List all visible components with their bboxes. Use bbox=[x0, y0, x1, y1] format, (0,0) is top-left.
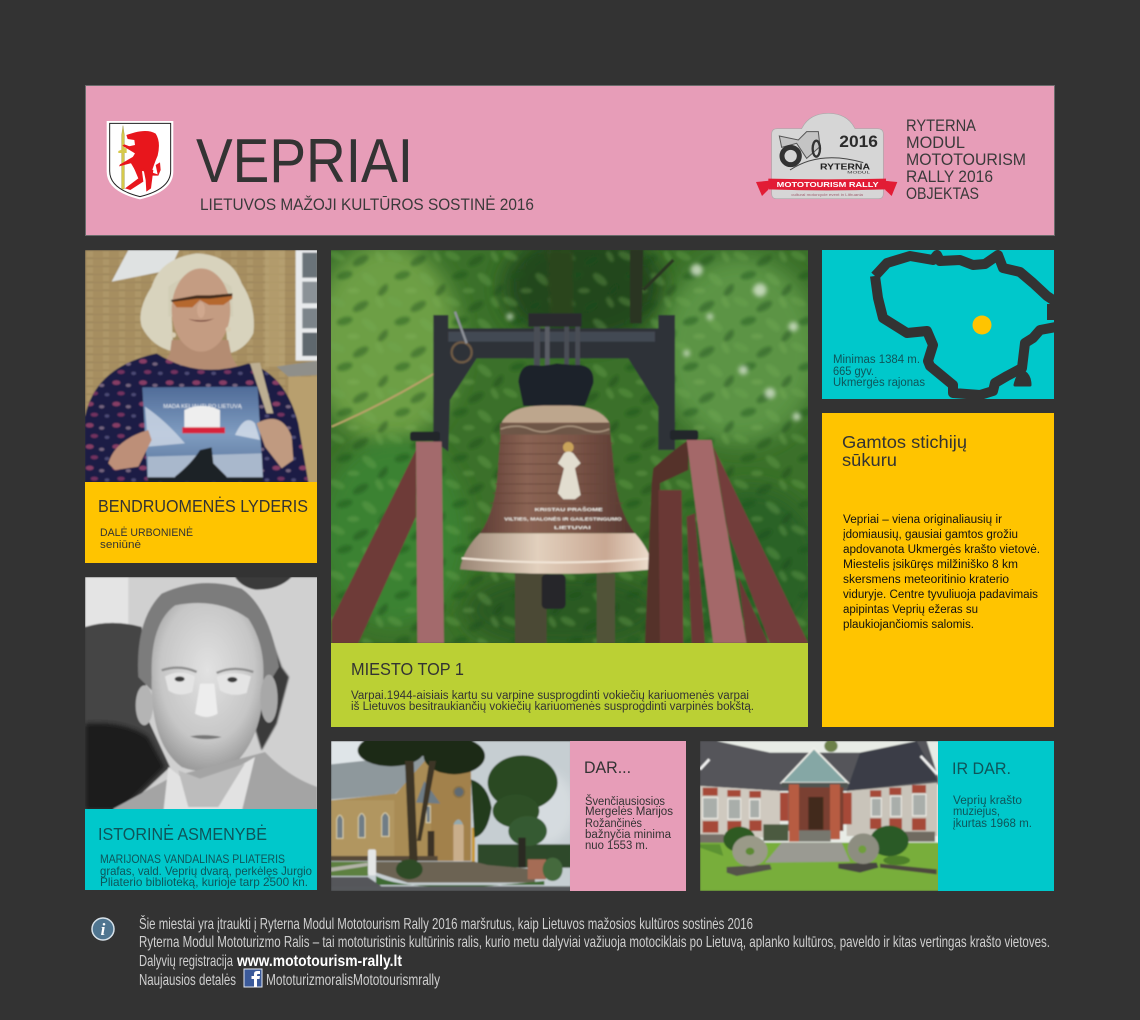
text block: muziejus, bbox=[953, 806, 1000, 818]
panel: nature description bbox=[822, 413, 1054, 727]
photo: bell in frame bbox=[331, 250, 808, 643]
text block: Pliaterio biblioteką, kurioje tarp 2500 kn. bbox=[100, 875, 308, 889]
text block bbox=[843, 514, 1040, 631]
text block: Miestelis įsikūręs milžiniško 8 km bbox=[843, 559, 1018, 571]
text block: Minimas 1384 m. bbox=[833, 354, 920, 366]
text block: Mergelės Marijos bbox=[585, 806, 673, 818]
footer text: MototurizmoralisMototourismrally bbox=[266, 972, 440, 989]
text block: skersmens meteoritinio kraterio bbox=[843, 574, 1009, 586]
header side text: MOTOTOURISM bbox=[906, 150, 1026, 169]
panel: map of Lithuania bbox=[822, 250, 1056, 399]
text block: įdomiausių, gausiai gamtos grožiu bbox=[843, 529, 1018, 541]
text block bbox=[100, 526, 193, 551]
heading bbox=[842, 432, 967, 470]
photo: bell in frame: VILTIES, MALONĖS IR GAILESTINGUMO bbox=[504, 516, 622, 523]
footer text bbox=[139, 914, 1050, 989]
panel: historical figure caption bbox=[85, 809, 317, 890]
logo: Mototourism Rally 2016: 2016 bbox=[839, 132, 878, 151]
icon: facebook bbox=[244, 969, 262, 987]
text block: Ukmergės rajonas bbox=[833, 377, 925, 389]
logo: Mototourism Rally 2016: MODUL bbox=[847, 170, 870, 174]
heading: MIESTO TOP 1 bbox=[351, 659, 464, 679]
photo: bell in frame: LIETUVAI bbox=[554, 525, 592, 531]
icon: information: i bbox=[101, 920, 106, 939]
footer text: Dalyvių registracija bbox=[139, 953, 233, 970]
panel: community leader caption bbox=[85, 482, 317, 563]
footer text: Naujausios detalės bbox=[139, 972, 236, 989]
subtitle: LIETUVOS MAŽOJI KULTŪROS SOSTINĖ 2016 bbox=[200, 195, 534, 214]
text block: apipintas Veprių ežeras su bbox=[843, 604, 978, 616]
map outline bbox=[875, 255, 1056, 395]
icon: Vepriai coat of arms bbox=[107, 121, 173, 199]
logo: Mototourism Rally 2016 bbox=[756, 113, 897, 199]
icon: information bbox=[92, 918, 114, 940]
heading: sūkuru bbox=[842, 450, 897, 470]
heading: ISTORINĖ ASMENYBĖ bbox=[98, 824, 267, 844]
text block: seniūnė bbox=[100, 539, 141, 551]
logo: Mototourism Rally 2016: MOTOTOURISM RALLY bbox=[777, 180, 879, 189]
text block: apdovanota Ukmergės krašto vietovė. bbox=[843, 544, 1040, 556]
header side text: RYTERNA bbox=[906, 116, 977, 135]
text block: plaukiojančiomis salomis. bbox=[843, 619, 974, 631]
heading: BENDRUOMENĖS LYDERIS bbox=[98, 496, 308, 516]
header side text: MODUL bbox=[906, 133, 965, 152]
panel: header bbox=[86, 86, 1054, 236]
header side text: RALLY 2016 bbox=[906, 167, 993, 186]
text block bbox=[100, 852, 312, 889]
text block: nuo 1553 m. bbox=[585, 840, 648, 852]
text block: 665 gyv. bbox=[833, 366, 874, 378]
photo: bell in frame: KRISTAU PRAŠOME bbox=[535, 505, 604, 513]
photo: museum bbox=[700, 740, 940, 891]
text block: įkurtas 1968 m. bbox=[953, 818, 1032, 830]
text block: grafas, vald. Veprių dvarą, perkėlęs Jurgio bbox=[100, 864, 312, 878]
heading: Gamtos stichijų bbox=[842, 432, 967, 452]
text block bbox=[953, 795, 1032, 830]
text block: Veprių krašto bbox=[953, 795, 1022, 807]
text block: DALĖ URBONIENĖ bbox=[100, 526, 193, 539]
panel: museum caption bbox=[938, 741, 1054, 891]
text block: Varpai.1944-aisiais kartu su varpine susprogdinti vokiečių kariuomenės varpai bbox=[351, 690, 749, 702]
logo: Mototourism Rally 2016: RYTERNA bbox=[820, 161, 870, 171]
text block: Rožančinės bbox=[585, 818, 642, 830]
footer text: Šie miestai yra įtraukti į Ryterna Modul Mototourism Rally 2016 maršrutus, kaip Lietuvos mažosios kultūros sostinės 2016 bbox=[139, 914, 753, 933]
text block bbox=[351, 690, 754, 713]
heading: IR DAR. bbox=[952, 759, 1011, 778]
photo: community leader holding poster: MADA KELIAUTI PO LIETUVĄ bbox=[163, 404, 242, 410]
footer text: www.mototourism-rally.lt bbox=[236, 953, 403, 970]
photo: church bbox=[331, 734, 574, 891]
heading: DAR... bbox=[584, 758, 631, 777]
photo: historical figure portrait bbox=[85, 577, 320, 812]
text block: Švenčiausiosios bbox=[585, 795, 665, 808]
logo: Mototourism Rally 2016: cultural motorcycle event in Lithuania bbox=[791, 193, 863, 197]
panel: town top caption bbox=[331, 643, 808, 727]
text block: iš Lietuvos besitraukiančių vokiečių kariuomenės susprogdinti varpinės bokštą. bbox=[351, 701, 754, 713]
text block: bažnyčia minima bbox=[585, 829, 672, 841]
title: VEPRIAI bbox=[196, 127, 413, 196]
text block: viduryje. Centre tyvuliuoja padavimais bbox=[843, 589, 1038, 601]
text block bbox=[833, 354, 925, 389]
location dot bbox=[972, 316, 992, 334]
text block bbox=[585, 795, 673, 852]
header side text: OBJEKTAS bbox=[906, 184, 979, 203]
photo: community leader holding poster bbox=[85, 250, 320, 485]
header side text bbox=[906, 116, 1026, 203]
text block: MARIJONAS VANDALINAS PLIATERIS bbox=[100, 852, 285, 866]
text block: Vepriai – viena originaliausių ir bbox=[843, 514, 1002, 526]
panel: church caption bbox=[570, 741, 686, 891]
infographic canvas bbox=[85, 85, 1055, 988]
